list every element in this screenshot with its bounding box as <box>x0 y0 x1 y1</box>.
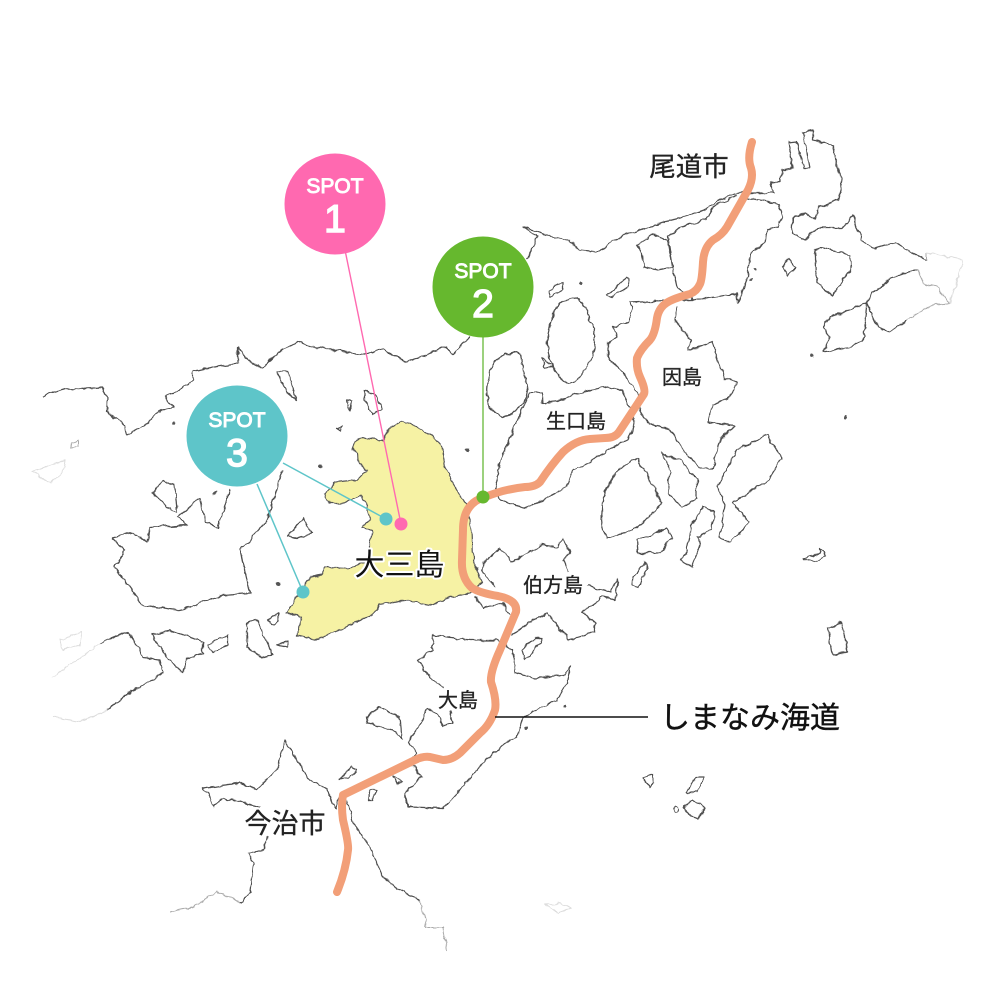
label: Hakatajima: 伯方島 <box>523 574 583 597</box>
marker: spot 3 south <box>296 586 310 598</box>
marker: spot 3 north <box>380 512 392 526</box>
badge: SPOT 2 <box>432 236 534 338</box>
map: coastlines of surrounding islands <box>32 130 963 950</box>
label: Onomichi city: 尾道市 <box>649 152 729 182</box>
badge: SPOT 2: SPOT <box>454 260 512 283</box>
marker: spot 1 <box>394 518 408 530</box>
island: Omishima highlighted in yellow <box>286 421 482 640</box>
route: Shimanami Kaido highway <box>337 142 752 892</box>
label: Innoshima: 因島 <box>662 366 702 389</box>
leader line to Shimanami Kaido label <box>495 716 648 718</box>
label: Oshima: 大島 <box>438 689 478 712</box>
label: Omishima: 大三島 <box>354 549 444 582</box>
badge: SPOT 1 <box>284 154 386 254</box>
badge: SPOT 2: 2 <box>472 283 494 326</box>
spot 3 leader line to north point <box>283 463 386 519</box>
spot 2 leader line <box>482 335 484 497</box>
badge: SPOT 1: SPOT <box>306 175 364 198</box>
label: Ikuchijima: 生口島 <box>546 410 606 433</box>
spot 1 leader line <box>345 250 401 524</box>
label: Shimanami Kaido: しまなみ海道 <box>660 702 840 735</box>
label: Imabari city: 今治市 <box>244 809 326 839</box>
badge: SPOT 3 <box>186 386 288 486</box>
badge: SPOT 3: SPOT <box>208 409 266 432</box>
badge: SPOT 1: 1 <box>324 198 346 241</box>
marker: spot 2 <box>476 490 490 504</box>
badge: SPOT 3: 3 <box>226 432 248 475</box>
spot 3 leader line to south point <box>257 484 303 592</box>
